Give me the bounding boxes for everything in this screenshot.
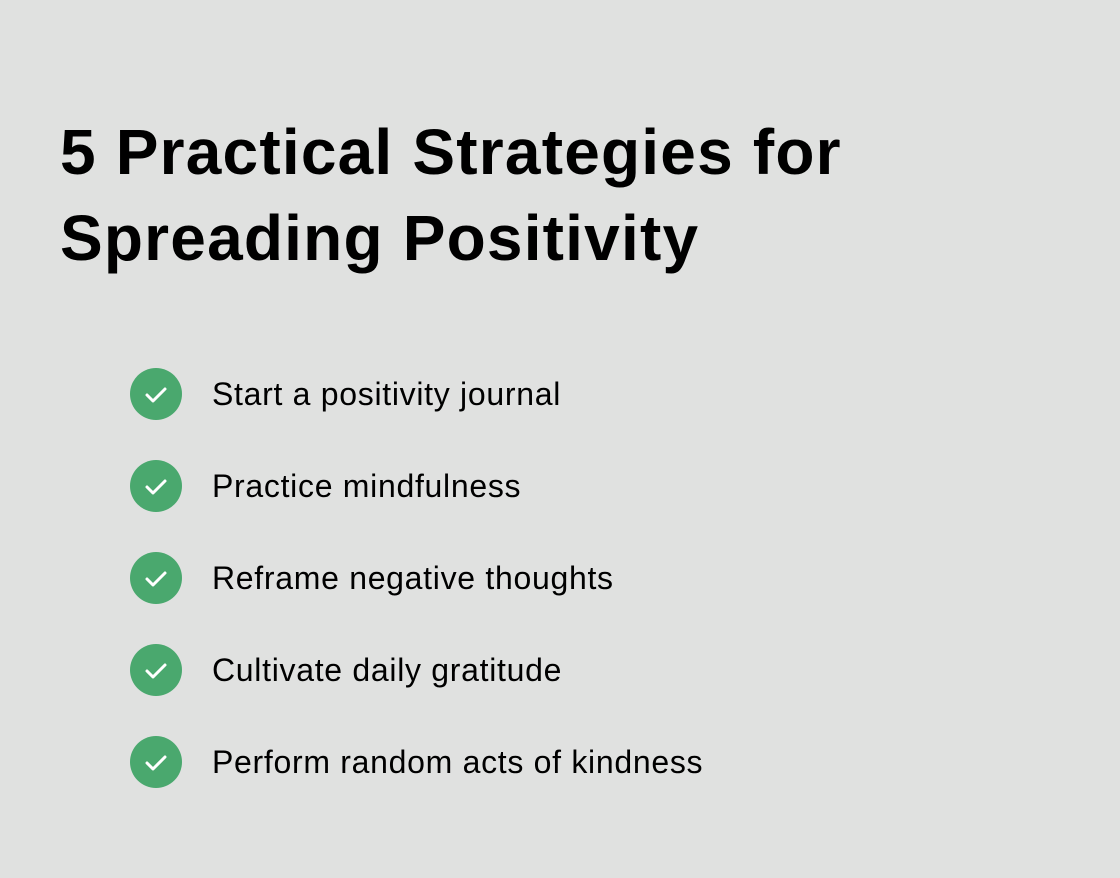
- icon: check: [130, 644, 182, 696]
- item 2: [130, 460, 521, 512]
- icon: check: [130, 552, 182, 604]
- item 3: [130, 552, 614, 604]
- icon: check: [130, 368, 182, 420]
- title: [60, 116, 842, 274]
- text: Reframe negative thoughts: [212, 560, 614, 596]
- icon: check: [130, 736, 182, 788]
- title: Spreading Positivity: [60, 202, 699, 274]
- text: Start a positivity journal: [212, 376, 561, 412]
- title: 5 Practical Strategies for: [60, 116, 842, 188]
- item 5: [130, 736, 703, 788]
- text: Cultivate daily gratitude: [212, 652, 562, 688]
- text: Practice mindfulness: [212, 468, 521, 504]
- icon: check: [130, 460, 182, 512]
- item 4: [130, 644, 562, 696]
- text: Perform random acts of kindness: [212, 744, 703, 780]
- item 1: [130, 368, 561, 420]
